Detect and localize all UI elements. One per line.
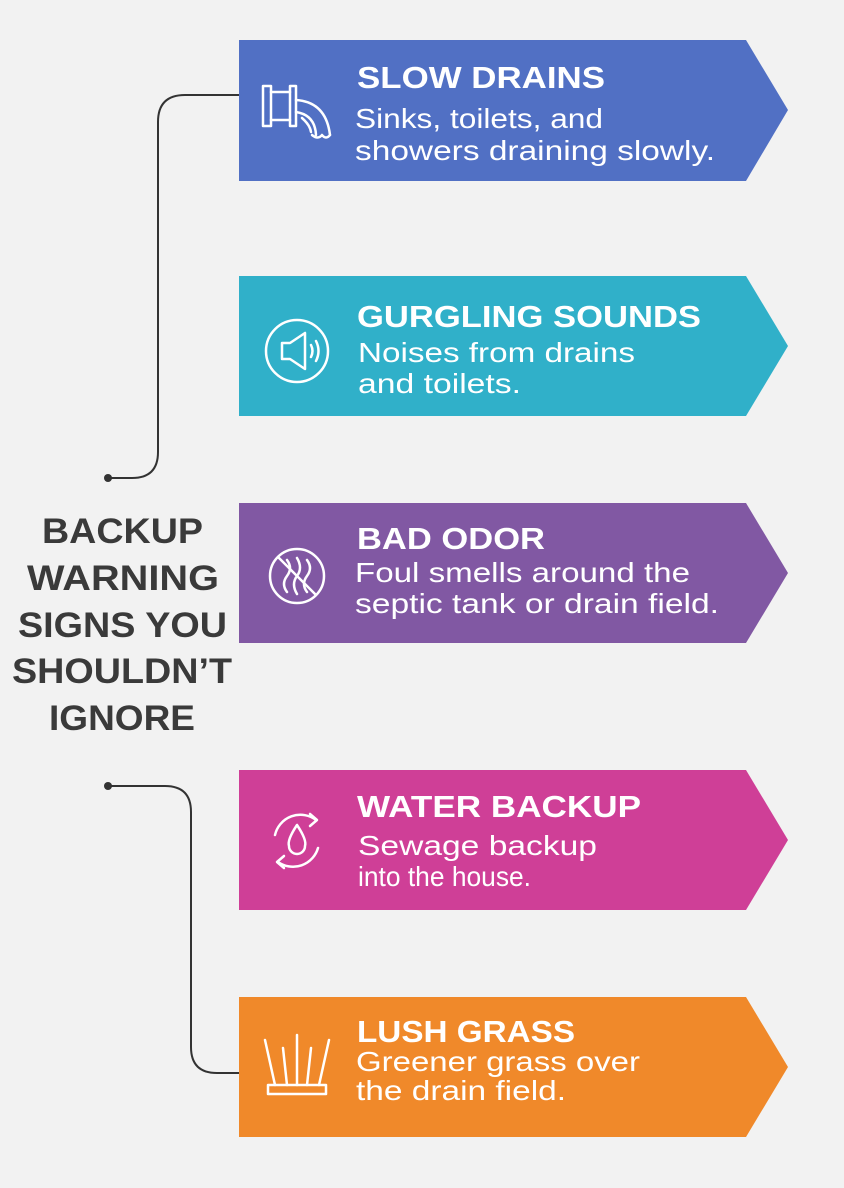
icon: speaker	[266, 320, 328, 382]
panel: water backup: WATER BACKUP	[357, 789, 641, 824]
panel: water backup	[239, 770, 788, 910]
panel: water backup: into the house.	[358, 861, 531, 892]
icon: no smell	[270, 549, 324, 603]
panel: slow drains: showers draining slowly.	[355, 135, 715, 166]
panel: bad odor: Foul smells around the	[355, 557, 690, 588]
panel: gurgling sounds: Noises from drains	[358, 337, 635, 368]
panel: gurgling sounds: GURGLING SOUNDS	[357, 299, 701, 334]
title: BACKUP	[42, 512, 203, 551]
panel: gurgling sounds: and toilets.	[358, 368, 521, 399]
panel: lush grass	[239, 997, 788, 1137]
icon: recycle drop	[275, 814, 318, 868]
panel: slow drains: Sinks, toilets, and	[355, 103, 603, 134]
title: SIGNS YOU	[18, 606, 227, 645]
panel: slow drains	[239, 40, 788, 181]
icon: pipe	[263, 86, 330, 138]
panel: water backup: Sewage backup	[358, 830, 597, 861]
title: WARNING	[27, 559, 219, 598]
title	[12, 512, 232, 738]
connector: bottom	[104, 782, 239, 1073]
title: IGNORE	[49, 699, 195, 738]
panel: bad odor: BAD ODOR	[357, 521, 545, 556]
panel: gurgling sounds	[239, 276, 788, 416]
panel: lush grass: the drain field.	[356, 1075, 566, 1106]
panel: bad odor	[239, 503, 788, 643]
panel: lush grass: LUSH GRASS	[357, 1014, 575, 1049]
panel: bad odor: septic tank or drain field.	[355, 588, 719, 619]
icon: grass	[265, 1035, 329, 1094]
panel: lush grass: Greener grass over	[356, 1046, 640, 1077]
title: SHOULDN’T	[12, 652, 232, 691]
connector: top	[104, 95, 239, 482]
panel: slow drains: SLOW DRAINS	[357, 60, 605, 95]
